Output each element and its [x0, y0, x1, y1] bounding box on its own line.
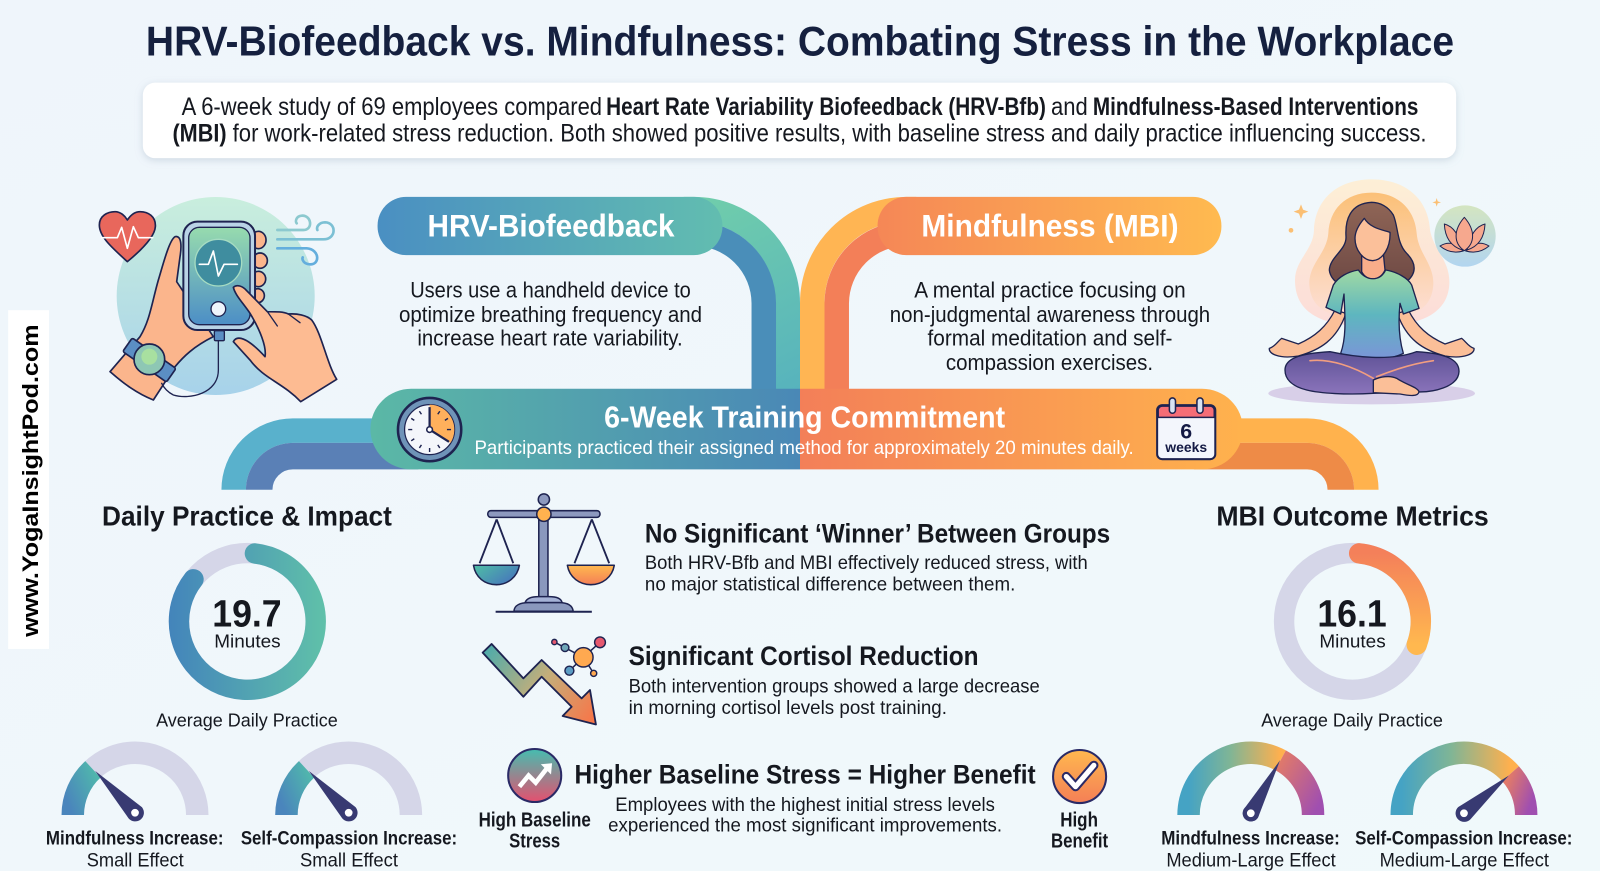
icon: calendar: 6 [1180, 420, 1192, 444]
HRV description: increase heart rate variability. [417, 326, 683, 351]
intro card [143, 83, 1456, 158]
text block: no significant winner: Both HRV-Bfb and MBI effectively reduced stress, with [645, 552, 1088, 574]
connector ribbons [234, 209, 1366, 490]
text block: no significant winner: no major statistical difference between them. [645, 574, 1015, 596]
icon: balance scale [473, 494, 614, 612]
pointing hand [233, 286, 337, 402]
holding hand [110, 237, 213, 400]
text block: cortisol reduction: in morning cortisol levels post training. [629, 697, 947, 719]
panel: daily practice and impact [46, 500, 457, 871]
gauge: mindfulness medium-large effect [1161, 753, 1340, 871]
label: high baseline stress [479, 809, 591, 853]
donut chart: Minutes [1319, 631, 1386, 652]
HRV description: Users use a handheld device to [410, 278, 691, 303]
HRV description: optimize breathing frequency and [399, 302, 702, 327]
header: Mindfulness (MBI): Mindfulness (MBI) [921, 208, 1179, 244]
text block: cortisol reduction: Both intervention groups showed a large decrease [629, 676, 1040, 698]
MBI description: A mental practice focusing on [914, 278, 1186, 303]
MBI description: formal meditation and self- [928, 326, 1172, 351]
text block: higher baseline stress [574, 759, 1036, 836]
arms [1269, 310, 1474, 357]
label: high benefit: High [1060, 809, 1098, 831]
text block: no significant winner [645, 519, 1110, 596]
icon: calendar [1157, 398, 1215, 459]
donut caption: Average Daily Practice [1261, 709, 1443, 730]
donut chart: Minutes [214, 631, 281, 652]
device [183, 222, 255, 341]
gauge: self-compassion medium-large effect [1355, 753, 1572, 871]
training commitment band [370, 389, 1243, 469]
MBI description [890, 278, 1210, 375]
gauge: mindfulness small effect: Mindfulness Increase: [46, 828, 223, 850]
heading: Daily Practice & Impact [102, 500, 392, 531]
MBI description: compassion exercises. [946, 350, 1153, 375]
neck and face [1355, 218, 1390, 279]
header: HRV-Biofeedback: HRV-Biofeedback [428, 208, 675, 244]
label: high benefit [1051, 809, 1108, 853]
intro text: Heart Rate Variability Biofeedback (HRV-Bfb) [606, 93, 1046, 121]
lotus badge [1434, 205, 1496, 267]
icon: high benefit [1053, 750, 1106, 803]
heading: MBI Outcome Metrics [1216, 500, 1489, 531]
panel: MBI outcome metrics [1161, 500, 1572, 871]
wristband [123, 338, 176, 382]
header: Mindfulness (MBI) [878, 197, 1221, 255]
title: HRV-Biofeedback vs. Mindfulness: Combating Stress in the Workplace [146, 17, 1454, 64]
fingers behind device [251, 231, 267, 303]
intro text: for work-related stress reduction. Both showed positive results, with baseline stress and daily practice influencing success. [233, 120, 1427, 148]
label: high baseline stress: Stress [509, 831, 560, 853]
gauge: mindfulness medium-large effect: Mindfulness Increase: [1161, 828, 1340, 850]
MBI description: non-judgmental awareness through [890, 302, 1210, 327]
illustration: meditating person [1268, 179, 1496, 404]
gauge: mindfulness small effect [46, 753, 223, 871]
donut caption: Average Daily Practice [156, 709, 338, 730]
intro text: (MBI) [172, 120, 227, 148]
band heading: 6-Week Training Commitment [604, 400, 1005, 434]
sparkles [1289, 198, 1441, 233]
icon: calendar: weeks [1164, 440, 1207, 456]
text block: higher baseline stress: experienced the most significant improvements. [608, 814, 1002, 836]
intro text [172, 93, 1427, 148]
gauge: self-compassion medium-large effect: Self-Compassion Increase: [1355, 828, 1572, 850]
icon: breath [277, 216, 334, 264]
watermark: www.YogaInsightPod.com [18, 324, 43, 638]
icon: high baseline stress [508, 749, 561, 802]
donut chart [179, 553, 316, 690]
gauge: self-compassion small effect [241, 753, 457, 871]
intro text: and [1051, 93, 1088, 121]
icon: heart [99, 212, 155, 262]
watermark [8, 310, 49, 649]
text block: cortisol reduction [629, 641, 1040, 719]
hair [1329, 202, 1414, 283]
icon: falling arrow with molecule [483, 637, 605, 724]
text block: no significant winner: No Significant ‘Winner’ Between Groups [645, 519, 1110, 549]
text block: higher baseline stress: Higher Baseline Stress = Higher Benefit [574, 759, 1036, 789]
donut chart [1284, 553, 1421, 690]
text block: higher baseline stress: Employees with the highest initial stress levels [615, 794, 995, 816]
band subtext: Participants practiced their assigned method for approximately 20 minutes daily. [474, 437, 1134, 459]
intro text: Mindfulness-Based Interventions [1093, 93, 1418, 121]
intro text: A 6-week study of 69 employees compared [182, 93, 602, 121]
icon: clock [398, 398, 461, 461]
text block: cortisol reduction: Significant Cortisol Reduction [629, 641, 979, 671]
illustration: handheld HRV device [99, 197, 337, 402]
donut chart: 16.1 [1317, 592, 1387, 634]
label: high benefit: Benefit [1051, 831, 1108, 853]
label: high baseline stress: High Baseline [479, 809, 591, 831]
shirt [1326, 270, 1419, 360]
donut chart: 19.7 [212, 592, 282, 634]
legs [1285, 352, 1459, 396]
header: HRV-Biofeedback [378, 197, 722, 255]
gauge: self-compassion small effect: Self-Compassion Increase: [241, 828, 457, 850]
HRV description [399, 278, 702, 351]
